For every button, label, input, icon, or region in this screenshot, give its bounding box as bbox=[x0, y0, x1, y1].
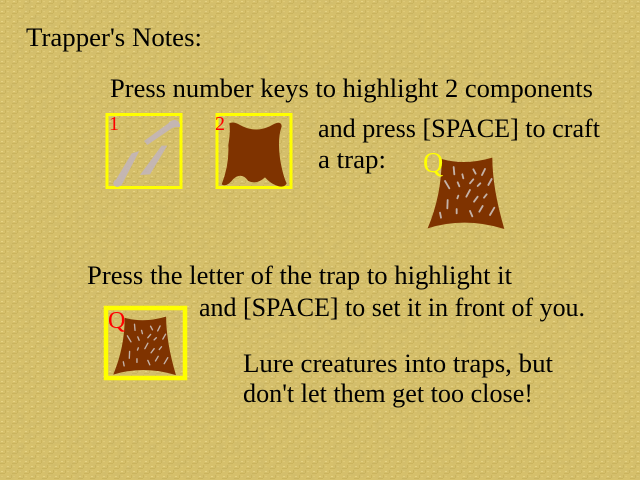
crafted trap icon bbox=[423, 148, 504, 229]
icon: bones bbox=[113, 120, 180, 187]
instruction: set trap: and [SPACE] to set it in front of you. bbox=[199, 293, 585, 322]
number label 1: 1 bbox=[109, 113, 119, 135]
number label 2: 2 bbox=[215, 113, 225, 135]
component 1: bones bbox=[107, 113, 181, 188]
instruction continued: a trap: bbox=[318, 145, 386, 174]
trap letter Q: Q bbox=[108, 308, 125, 334]
component 2: hide bbox=[215, 113, 291, 188]
instruction: highlight trap: Press the letter of the trap to highlight it bbox=[87, 261, 513, 290]
icon: hide bbox=[222, 122, 287, 187]
instruction: craft a trap: and press [SPACE] to craft bbox=[318, 114, 601, 143]
trap letter Q: Q bbox=[423, 148, 443, 179]
instruction: highlight components: Press number keys to highlight 2 components bbox=[110, 74, 593, 103]
title: Trapper's Notes: bbox=[26, 23, 202, 52]
warning text line 2: don't let them get too close! bbox=[243, 379, 533, 408]
highlighted trap bbox=[106, 308, 185, 378]
warning text line 1: Lure creatures into traps, but bbox=[243, 349, 554, 378]
